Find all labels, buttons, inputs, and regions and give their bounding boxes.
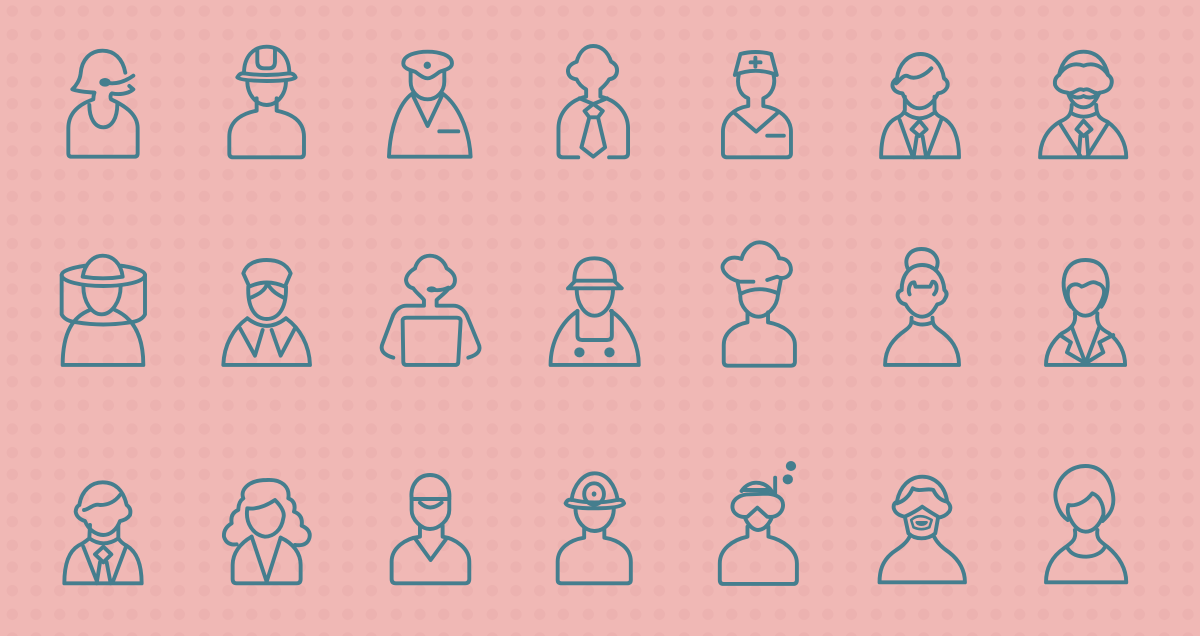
icon: businessman in suit xyxy=(881,54,959,157)
icon: police officer xyxy=(389,52,471,157)
icon: nurse xyxy=(723,52,791,157)
icon: call center agent with laptop xyxy=(382,256,480,365)
icon: worker with cap xyxy=(392,475,469,583)
icon: man with moustache in suit xyxy=(1040,52,1126,157)
icon: young businessman with tie xyxy=(64,482,142,583)
icon: bearded man xyxy=(880,477,965,582)
icon: woman with curly hair xyxy=(224,480,310,583)
icon: worker with bowler hat and overalls xyxy=(551,258,639,365)
icon: miner with headlamp xyxy=(558,473,631,583)
icon: beekeeper xyxy=(62,256,145,365)
icon: woman with headset xyxy=(68,51,138,157)
icon: woman in blazer xyxy=(1046,260,1125,365)
icon: scuba diver xyxy=(720,461,797,584)
icon: chef xyxy=(723,242,795,366)
icon: man with tie xyxy=(558,46,628,157)
icon: construction worker with hard hat xyxy=(229,47,304,157)
icon: woman with hair bun xyxy=(885,249,959,365)
icon: person with cap and collar xyxy=(223,260,310,365)
icon: woman with bob haircut xyxy=(1046,466,1126,582)
